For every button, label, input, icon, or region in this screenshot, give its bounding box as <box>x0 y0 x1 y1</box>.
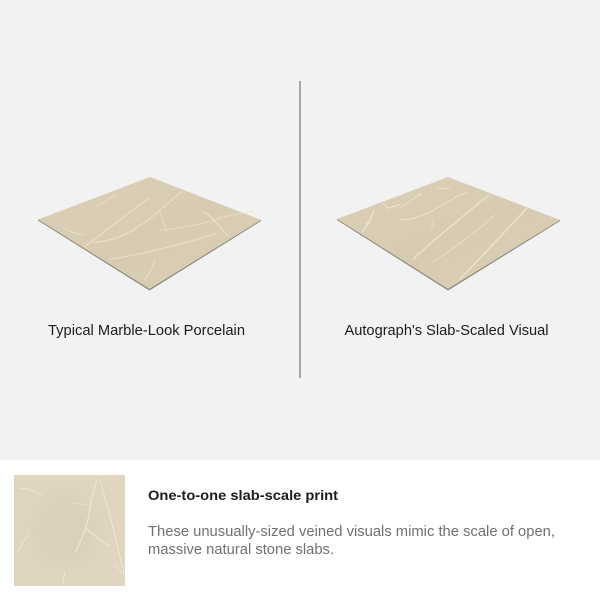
upper comparison background <box>0 0 600 460</box>
lower panel background <box>0 460 600 600</box>
description: massive natural stone slabs. <box>148 542 334 558</box>
description: These unusually-sized veined visuals mimic the scale of open, <box>148 524 555 540</box>
centre divider <box>299 81 301 378</box>
description <box>148 524 555 558</box>
right slab label: Autograph's Slab-Scaled Visual <box>344 323 548 339</box>
right slab: Autograph slab-scaled visual <box>337 177 560 290</box>
left slab: typical marble-look porcelain <box>38 177 261 290</box>
heading: One-to-one slab-scale print <box>148 487 338 503</box>
marble swatch <box>14 475 125 586</box>
left slab label: Typical Marble-Look Porcelain <box>48 323 245 339</box>
